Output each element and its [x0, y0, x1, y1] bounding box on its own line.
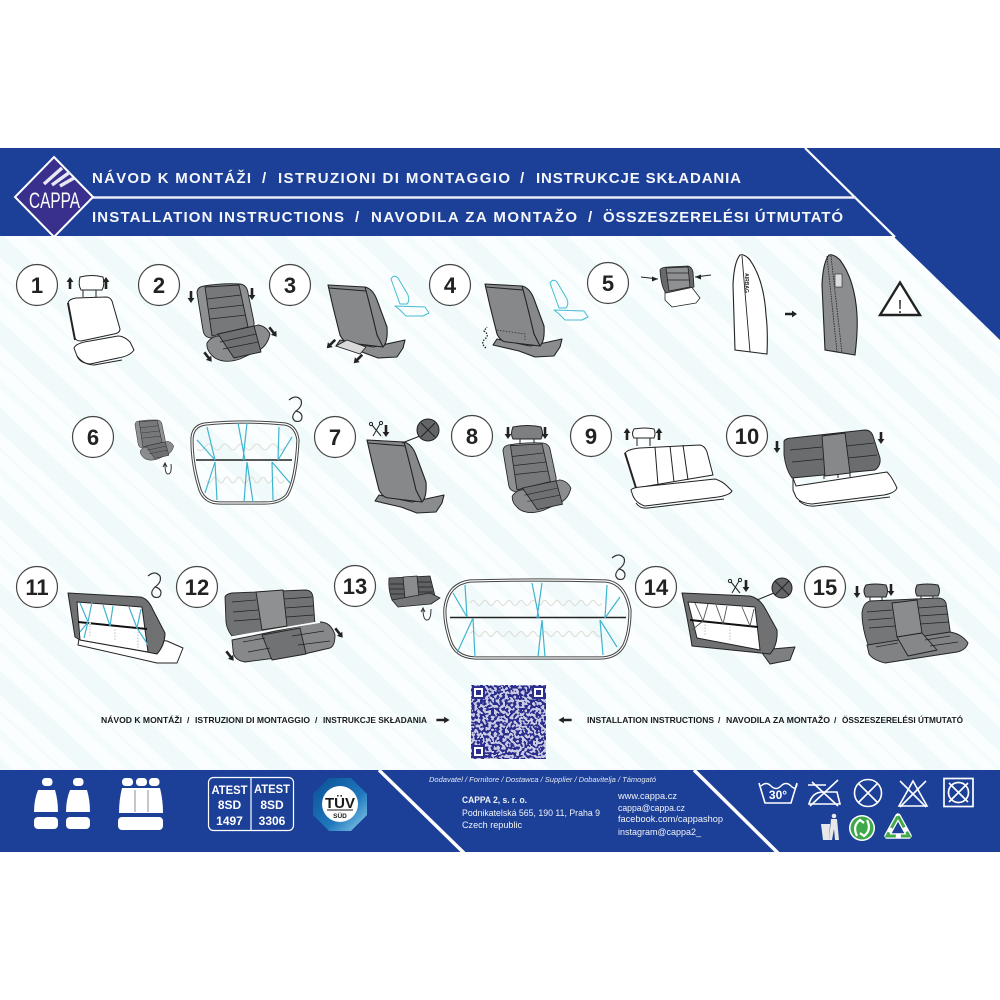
step 12: grey rear bench: [176, 566, 345, 663]
arrows: [854, 584, 894, 598]
seam: [497, 330, 525, 340]
contacts: [617, 791, 723, 838]
step 14: grey bench frame: [636, 566, 795, 664]
QR caption left: ISTRUZIONI DI MONTAGGIO: [195, 715, 310, 725]
warning triangle: [880, 282, 920, 317]
headrest: [632, 428, 655, 446]
grey seat: [197, 284, 270, 361]
header title line 1: INSTRUKCJE SKŁADANIA: [536, 170, 741, 187]
hook: [289, 397, 302, 421]
header title line 1: [92, 169, 741, 187]
step 6: front seat frame: [72, 397, 302, 503]
curved arrow: [163, 463, 171, 474]
number badge 6: 6: [87, 425, 99, 450]
arrows: [505, 427, 548, 439]
number badge 15: 15: [813, 575, 837, 600]
no-cut symbol: [402, 419, 439, 443]
hook: [148, 573, 161, 597]
grey side panel: [822, 255, 857, 355]
QR caption right: /: [718, 715, 721, 725]
cyan mini seat: [391, 276, 429, 316]
number badge 10: 10: [735, 424, 759, 449]
number badge 2: [138, 264, 180, 306]
address: [462, 795, 600, 831]
ATEST badge: [208, 777, 294, 831]
number badge 1: 1: [31, 273, 43, 298]
icon: trash man: [821, 814, 839, 840]
ATEST badge: 3306: [259, 814, 286, 828]
logo: CAPPA diamond: CAPPA: [29, 188, 80, 213]
number badge 4: 4: [444, 273, 457, 298]
white seat: [68, 276, 134, 365]
bench: [625, 445, 732, 508]
ATEST badge: ATEST: [212, 783, 248, 797]
number badge 4: [430, 264, 470, 306]
footer band: [0, 770, 1000, 853]
step 7: cut headrest holes: [314, 416, 444, 513]
QR caption left: /: [187, 715, 190, 725]
bench: [862, 598, 968, 663]
number badge 3: [270, 264, 310, 306]
white side panel: [733, 255, 767, 354]
header title line 1: NÁVOD K MONTÁŽI: [92, 169, 251, 187]
hook: [612, 555, 625, 579]
headrests: [864, 584, 940, 601]
QR caption right: INSTALLATION INSTRUCTIONS: [587, 715, 714, 725]
number badge 9: 9: [585, 424, 597, 449]
rear seat: [485, 284, 562, 357]
care icon: no bleach: [899, 781, 927, 807]
number badge 15: [804, 566, 846, 608]
logo: CAPPA diamond: [15, 157, 93, 237]
rear seat: [328, 285, 405, 358]
number badge 13: [334, 566, 376, 606]
icon: front seats: [34, 778, 90, 829]
step 9: white rear bench: [570, 416, 732, 508]
ATEST badge: 1497: [216, 814, 243, 828]
small seat: [135, 420, 174, 460]
QR caption right: NAVODILA ZA MONTAŽO: [726, 714, 830, 725]
step 10: bench with grey back: [726, 416, 897, 506]
number badge 14: [636, 566, 676, 608]
address: CAPPA 2, s. r. o.: [462, 795, 527, 806]
header title line 2: NAVODILA ZA MONTAŽO: [371, 208, 577, 226]
frame: [682, 593, 795, 664]
step 2: front seat with cover: [138, 264, 279, 364]
header title line 1: ISTRUZIONI DI MONTAGGIO: [278, 170, 510, 187]
header title line 2: [92, 208, 843, 226]
arrows up: [67, 277, 109, 289]
icon: green dot: [849, 815, 875, 841]
header title line 1: /: [520, 170, 525, 187]
contacts: www.cappa.cz: [617, 791, 677, 802]
rear seat: [367, 440, 444, 513]
QR caption right: [587, 714, 963, 725]
header title line 2: ÖSSZESZERELÉSI ÚTMUTATÓ: [603, 208, 843, 226]
number badge 5: 5: [602, 271, 614, 296]
dotted curly arrow: [483, 327, 487, 348]
scissors: [369, 421, 383, 436]
arrows: [641, 275, 711, 279]
headrest: [512, 426, 542, 446]
step 13: bench frame: [334, 555, 630, 658]
seat frame with straps: [192, 422, 298, 503]
number badge 5: [588, 262, 628, 304]
step 15: finished rear bench: [804, 566, 968, 663]
arrow: [785, 311, 797, 317]
step 3: rear view with flap: [270, 264, 429, 366]
arrows: [188, 288, 279, 364]
header title line 1: /: [262, 170, 267, 187]
cyan mini seat: [550, 280, 588, 320]
arrows: [624, 428, 662, 440]
icon: recycling: [887, 816, 909, 836]
ATEST badge: 8SD: [218, 798, 242, 812]
care icon: wash 30: 30°: [769, 788, 787, 802]
bench: [225, 590, 335, 662]
arrow from QR: [558, 717, 572, 723]
number badge 12: 12: [185, 575, 209, 600]
number badge 10: [726, 416, 768, 456]
care icon: no tumble dry: [944, 778, 973, 806]
patterned light panel: [0, 236, 1000, 770]
contacts: instagram@cappa2_: [618, 827, 702, 838]
QR caption left: [101, 714, 427, 725]
step 8: finished front seat: [452, 416, 571, 513]
QR caption left: /: [315, 715, 318, 725]
arrow: [383, 425, 389, 437]
number badge 2: 2: [153, 273, 165, 298]
QR caption right: ÖSSZESZERELÉSI ÚTMUTATÓ: [842, 714, 963, 725]
header title line 2: /: [355, 209, 360, 226]
contacts: facebook.com/cappashop: [618, 814, 723, 825]
TÜV SÜD badge: [313, 778, 367, 831]
long frame with straps: [445, 580, 630, 658]
arrows: [324, 337, 365, 366]
flap: [336, 340, 366, 354]
number badge 13: 13: [343, 574, 367, 599]
TÜV SÜD badge: TÜV: [325, 795, 355, 812]
number badge 3: 3: [284, 273, 296, 298]
small bench: [389, 576, 440, 607]
care icon: no tumble iron: [808, 780, 840, 806]
supplier caption: Dodavatel / Fornitore / Dostawca / Supplier / Dobavitelja / Támogató: [429, 775, 656, 784]
number badge 6: [72, 416, 114, 458]
curved arrow: [421, 608, 431, 620]
header title line 2: INSTALLATION INSTRUCTIONS: [92, 209, 344, 226]
address: Czech republic: [462, 820, 522, 831]
ATEST badge: 8SD: [260, 798, 284, 812]
ATEST badge: ATEST: [254, 782, 291, 796]
white side panel: AIRBAG: [743, 273, 749, 293]
arrows: [774, 432, 884, 453]
no-cut symbol: [757, 578, 792, 600]
number badge 11: [16, 566, 58, 608]
number badge 12: [176, 566, 218, 608]
arrows: [224, 626, 345, 663]
address: Podnikatelská 565, 190 11, Praha 9: [462, 808, 600, 819]
care icon: wash 30: [759, 783, 797, 803]
number badge 14: 14: [644, 575, 669, 600]
bench cushion: [793, 471, 897, 506]
step 1: remove headrest: [16, 264, 134, 365]
QR caption left: NÁVOD K MONTÁŽI: [101, 714, 182, 725]
step 5: airbag seam: [588, 255, 920, 355]
grey back: [784, 430, 880, 478]
header band: [0, 148, 1000, 340]
step 11: bench back frame: [16, 566, 183, 663]
step 4: rear view stitched: [430, 264, 588, 357]
contacts: cappa@cappa.cz: [618, 803, 685, 814]
QR code: [471, 685, 546, 759]
arrow to QR: [436, 717, 450, 723]
number badge 9: [570, 416, 612, 456]
seat: [503, 443, 571, 513]
care icon: no dry: [854, 780, 882, 806]
QR caption right: /: [834, 715, 837, 725]
QR caption left: INSTRUKCJE SKŁADANIA: [323, 715, 427, 725]
warning triangle: !: [897, 297, 903, 317]
bench frame: [68, 593, 183, 663]
number badge 8: 8: [466, 424, 478, 449]
icon: rear bench: [118, 778, 163, 830]
number badge 11: 11: [25, 575, 49, 600]
TÜV SÜD badge: SÜD: [333, 811, 347, 820]
header title line 2: /: [588, 209, 593, 226]
arrow: [743, 580, 749, 592]
number badge 7: 7: [329, 425, 341, 450]
scissors: [728, 578, 742, 593]
small seat: [660, 266, 700, 307]
